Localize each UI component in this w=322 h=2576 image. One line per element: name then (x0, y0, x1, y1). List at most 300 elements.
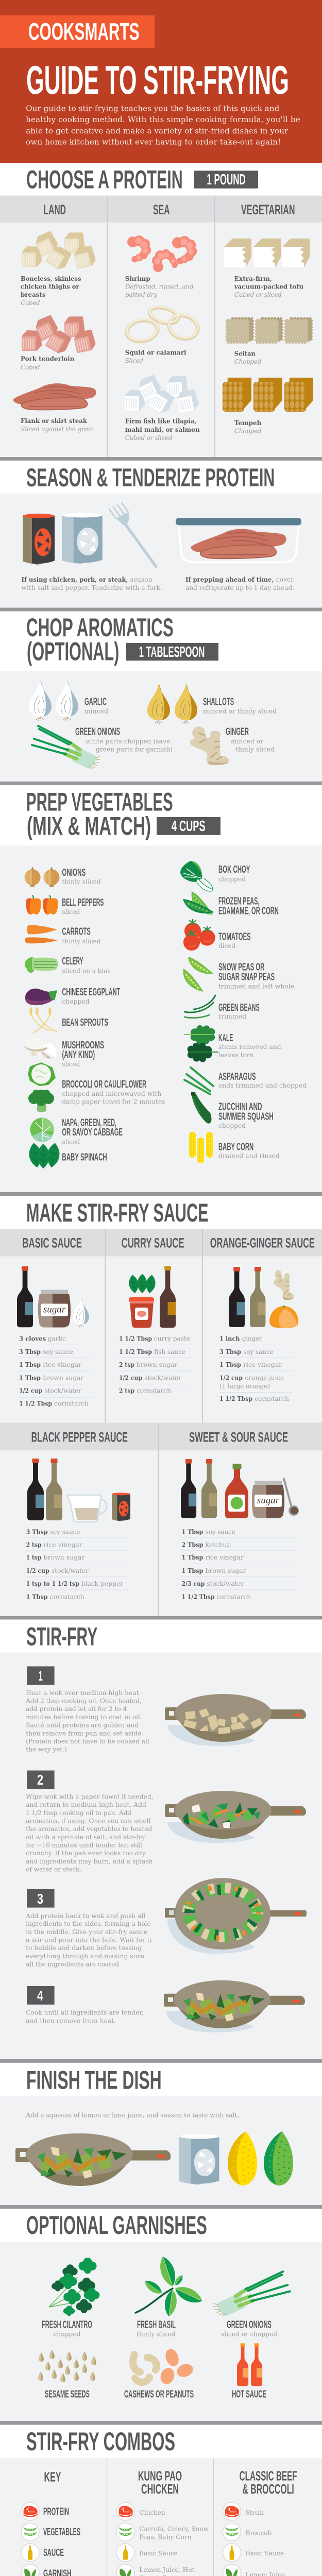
panel: combos grid (0, 2458, 322, 2576)
label: bok choy (218, 864, 250, 883)
icon: shallots (147, 683, 197, 724)
list: black pepper sauce: brown sugar (44, 1554, 85, 1561)
list: sweet and sour sauce: 1 Tbsp (181, 1567, 204, 1574)
text: season: season (130, 576, 152, 583)
heading: stir-fry combos: STIR-FRY COMBOS (26, 2427, 175, 2456)
label: asparagus: ASPARAGUS (218, 1071, 256, 1082)
list: sweet and sour sauce: soy sauce (206, 1528, 235, 1535)
list: sweet and sour sauce: cornstarch (216, 1594, 251, 1601)
icon: tofu (224, 239, 310, 267)
list: sweet and sour sauce: brown sugar (206, 1567, 246, 1574)
list: basic sauce: cornstarch (54, 1400, 89, 1407)
heading: optional garnishes: OPTIONAL GARNISHES (26, 2211, 207, 2240)
list: black pepper sauce: stock/water (52, 1567, 89, 1574)
step 3: in the middle. Give your stir-fry sauce (26, 1928, 147, 1936)
list: basic sauce: 1 1/2 Tbsp (19, 1400, 52, 1407)
labels: bottom row: HOT SAUCE (232, 2389, 266, 2400)
step 2: for ~10 minutes until tender but still (26, 1842, 142, 1849)
label: kale: KALE (218, 1032, 233, 1044)
icon: green onions (32, 726, 100, 769)
step 1: Heat a wok over medium-high heat. (26, 1689, 141, 1697)
list: black pepper sauce: 1 Tbsp (26, 1594, 48, 1601)
list: black pepper sauce: cornstarch (50, 1594, 84, 1601)
label: green onions: green parts for garnish) (96, 746, 173, 753)
icon: asparagus (184, 1067, 213, 1094)
label: celery (62, 956, 111, 975)
icon: basil (135, 2255, 205, 2317)
icon: chicken cubes (22, 230, 97, 272)
list: basic sauce: garlic (48, 1335, 66, 1343)
label: onions: thinly sliced (62, 878, 101, 886)
list: curry sauce: fish sauce (154, 1348, 185, 1355)
step 2: the aromatics, add vegetables to heated (26, 1825, 152, 1833)
text: chicken: breasts (21, 291, 46, 298)
label: eggplant: chopped (62, 998, 90, 1005)
icon: green beans (184, 995, 215, 1018)
icon: wok with finished stir-fry (164, 1980, 305, 2032)
step 3: Add protein back to wok and push all (25, 1912, 145, 1920)
icon: salt can (62, 513, 103, 564)
icon: wok with ingredients pushed aside (165, 1878, 307, 1954)
list: black pepper sauce: 1/2 cup (26, 1567, 49, 1574)
icon: finished wok (15, 2133, 171, 2186)
label: eggplant (62, 987, 120, 1005)
label: carrots: thinly sliced (62, 938, 101, 945)
sauce headings: CURRY SAUCE (122, 1235, 184, 1251)
text: pork (21, 355, 75, 371)
sauce headings (22, 1235, 315, 1445)
text: squid (125, 349, 187, 364)
heading: finish the dish: FINISH THE DISH (26, 2066, 162, 2095)
text: finish instruction: Add a squeeze of lemon or lime juice, and season to taste with salt. (25, 2111, 239, 2119)
step 2: and ingredients may burn, add a splash (26, 1858, 153, 1865)
label: zucchini: ZUCCHINI AND (218, 1101, 262, 1113)
list: black pepper sauce: 1 tsp (26, 1554, 42, 1561)
text: fish: Firm fish like tilapia, (125, 418, 196, 425)
combo: kung pao chicken: Chicken (139, 2509, 165, 2516)
text: steak: Sliced against the grain (21, 426, 94, 433)
list: sweet and sour sauce: ketchup (206, 1541, 231, 1548)
icon: hot sauce (237, 2343, 262, 2386)
list: basic sauce: rice vinegar (43, 1361, 81, 1368)
icon: eggplant (25, 989, 57, 1005)
list: orange-ginger sauce: orange juice (245, 1375, 284, 1382)
list: orange-ginger sauce: 1 Tbsp (219, 1361, 241, 1368)
icon: carrots (25, 925, 58, 943)
step 2: of water or stock. (26, 1866, 81, 1873)
step 2: crunchy. If the pan ever looks too dry (26, 1850, 146, 1857)
combo: kung pao chicken: KUNG PAO (138, 2468, 182, 2483)
icon: tempeh (223, 378, 313, 412)
label: tomatoes: TOMATOES (218, 931, 251, 942)
list: basic sauce: brown sugar (43, 1375, 84, 1382)
list: orange-ginger sauce: 1/2 cup (219, 1375, 243, 1382)
step 4: 4 (37, 1988, 43, 2004)
combo: kung pao chicken (116, 2468, 209, 2576)
text: fish: Cubed or sliced (125, 434, 173, 442)
label: asparagus: ends trimmed and chopped (218, 1082, 307, 1089)
labels: top row: FRESH CILANTRO (42, 2319, 92, 2331)
label: bell peppers: BELL PEPPERS (62, 897, 104, 908)
column headings: LAND (43, 202, 66, 217)
text: seitan (234, 350, 262, 365)
panel: season (0, 494, 322, 608)
icon: fork (109, 503, 156, 567)
text: chicken: Boneless, skinless (21, 275, 81, 282)
list: orange-ginger sauce: rice vinegar (243, 1361, 282, 1368)
list: black pepper sauce: black pepper (81, 1580, 123, 1587)
label: onions (62, 867, 101, 886)
step 4 (26, 1986, 144, 2024)
column headings: SEA (153, 202, 170, 217)
text: season (22, 576, 162, 591)
step 2: oil with a sprinkle of salt, and stir-fry (26, 1834, 145, 1841)
combo: key: PROTEIN (43, 2506, 69, 2518)
label: ginger (226, 726, 275, 753)
list: sweet and sour sauce: 1 Tbsp (181, 1554, 204, 1561)
icon: seitan (227, 318, 312, 343)
labels: bottom row (45, 2389, 266, 2400)
icon: pork cubes (22, 314, 97, 355)
panel: garnishes (0, 2242, 322, 2421)
list: black pepper sauce: 3 Tbsp (26, 1528, 48, 1535)
icon: celery (25, 957, 58, 973)
combo: key: VEGETABLES (43, 2527, 80, 2538)
list: curry sauce: brown sugar (137, 1361, 177, 1368)
icon: lime (264, 2131, 293, 2185)
list: orange-ginger sauce: 1 inch (219, 1335, 240, 1343)
step 2: 1 1/2 tbsp cooking oil to pan. Add (26, 1809, 131, 1817)
icon: tomatoes (183, 919, 215, 951)
heading: prep vegetables: (MIX & MATCH) (27, 811, 151, 840)
text: steak: Flank or skirt steak (21, 417, 88, 425)
panel: sauces (0, 1229, 322, 1616)
label: ginger: GINGER (226, 726, 249, 738)
text: tofu (234, 275, 303, 298)
text: seitan: Chopped (234, 358, 262, 365)
label: garlic: GARLIC (84, 697, 107, 708)
heading: choose a protein: 1 POUND (207, 172, 246, 188)
labels: top row: sliced or chopped (221, 2331, 277, 2338)
text: pork: Cubed (21, 364, 40, 371)
step 2: aromatics, if using. Once you can smell (26, 1818, 151, 1825)
step 3: all the ingredients are coated. (26, 1961, 121, 1968)
step 1: Sauté until proteins are golden and (26, 1722, 139, 1729)
panel: vegetables (0, 845, 322, 1192)
step 1: 1 (39, 1668, 43, 1684)
icon: green onions (213, 2272, 290, 2316)
panel: stir-fry steps (0, 1653, 322, 2059)
icon: cauliflower (28, 1062, 56, 1086)
list: curry sauce: cornstarch (137, 1387, 171, 1394)
list: orange-ginger sauce: 3 Tbsp (219, 1348, 241, 1355)
text: fish: mahi mahi, or salmon (125, 426, 200, 433)
step 2: 2 (37, 1772, 43, 1788)
labels: top row (42, 2319, 277, 2338)
list: black pepper sauce: rice vinegar (44, 1541, 82, 1548)
combo: classic beef and broccoli: Steak (245, 2509, 264, 2516)
labels: bottom row: SESAME SEEDS (45, 2389, 90, 2400)
icon: ginger (190, 726, 229, 765)
label: green beans (218, 1002, 260, 1020)
step 3: to bubble and darken before tossing (26, 1944, 142, 1952)
label: celery: sliced on a bias (62, 968, 111, 975)
list: orange-ginger sauce: soy sauce (243, 1348, 274, 1355)
list: basic sauce: 1/2 cup (19, 1387, 42, 1394)
text: season: with salt and pepper. Tenderize with a fork. (22, 584, 162, 591)
label: mushrooms: sliced (62, 1061, 80, 1068)
icon: baby spinach (27, 1142, 61, 1168)
icon: snow peas (178, 957, 216, 993)
list: sweet and sour sauce: rice vinegar (206, 1554, 244, 1561)
icons: sweet and sour sauce ingredients (181, 1459, 299, 1518)
label: bok choy: BOK CHOY (218, 864, 250, 875)
icons: orange-ginger sauce ingredients (229, 1267, 298, 1328)
icon: wok with vegetables (165, 1791, 306, 1843)
list: orange-ginger sauce: (1 large orange) (219, 1382, 270, 1389)
icon: peas (183, 891, 218, 916)
label: shallots (203, 697, 277, 715)
heading: chop aromatics: CHOP AROMATICS (26, 613, 174, 642)
text: tempeh: Chopped (234, 428, 262, 435)
step 1: then remove from pan and set aside. (26, 1730, 143, 1737)
text: chicken: chicken thighs or (21, 283, 79, 291)
list: orange-ginger sauce: ginger (242, 1335, 262, 1343)
label: cabbage: sliced (62, 1139, 80, 1146)
step 1: minutes before tossing to coat in oil. (26, 1714, 142, 1721)
label: cabbage (62, 1117, 123, 1146)
label: green beans: trimmed (218, 1013, 246, 1020)
label: bok choy: chopped (218, 876, 246, 883)
label: baby corn: BABY CORN (218, 1142, 253, 1153)
icon: cilantro (49, 2258, 99, 2316)
heading: chop aromatics: 1 TABLESPOON (139, 644, 205, 660)
step 3: a stir and pour into the hole. Wait for it (26, 1937, 152, 1944)
label: baby corn (218, 1142, 280, 1159)
icon: mushrooms (24, 1037, 56, 1058)
heading: chop aromatics (26, 613, 218, 666)
step 3: 3 (37, 1891, 43, 1907)
label: baby corn: drained and rinsed (218, 1152, 280, 1159)
combo: classic beef and broccoli: Broccoli (245, 2529, 272, 2536)
label: ginger: thinly sliced (235, 746, 275, 753)
list: curry sauce: 1 1/2 Tbsp (119, 1348, 152, 1355)
label: onions: ONIONS (62, 867, 86, 878)
step 3: ingredients to the sides, forming a hole (26, 1920, 151, 1927)
icon: kale (184, 1025, 218, 1062)
list: orange-ginger sauce: 1 1/2 Tbsp (219, 1395, 252, 1402)
text: shrimp: Shrimp (125, 275, 150, 282)
label: zucchini: chopped (218, 1122, 246, 1129)
label: bell peppers (62, 897, 104, 916)
icon: bell peppers (26, 895, 58, 914)
label: asparagus (218, 1071, 307, 1089)
text: tempeh (234, 419, 262, 435)
icon: zucchini (191, 1092, 211, 1124)
list: black pepper sauce: 1 tsp to 1 1/2 tsp (26, 1580, 79, 1587)
heading: prep vegetables: 4 CUPS (172, 818, 206, 835)
sauce headings: BASIC SAUCE (22, 1235, 82, 1251)
combo: classic beef and broccoli (223, 2468, 297, 2576)
logo band: COOKSMARTS (28, 18, 140, 45)
list: basic sauce: stock/water (44, 1387, 81, 1394)
icon: squid rings (125, 303, 200, 344)
icon: lemon (228, 2131, 257, 2185)
text: shrimp (125, 275, 194, 298)
icon: onions (25, 867, 60, 887)
label: green onions: GREEN ONIONS (75, 726, 120, 738)
heading: make stir-fry sauce: MAKE STIR-FRY SAUCE (26, 1198, 208, 1227)
text: shrimp: Defrosted, rinsed, and (125, 283, 194, 291)
label: kale: stems removed and (218, 1043, 281, 1050)
label: snow peas: SUGAR SNAP PEAS (218, 971, 275, 982)
combo: key: KEY (44, 2469, 61, 2484)
text: tempeh: Tempeh (234, 419, 262, 427)
text: refrigerate: cover (276, 576, 294, 583)
list: curry sauce (119, 1335, 192, 1394)
list: basic sauce: 1 Tbsp (19, 1361, 41, 1368)
step 4: and then remove from heat. (26, 2017, 116, 2024)
intro text: own home kitchen without ever having to order take-out again! (26, 138, 281, 147)
label: celery: CELERY (62, 956, 83, 967)
icon: bok choy (180, 861, 213, 891)
icon: steak (13, 383, 96, 410)
label: mushrooms: (ANY KIND) (62, 1049, 95, 1061)
icon: cashews and peanuts (133, 2347, 195, 2386)
label: kale: leaves torn (218, 1052, 254, 1059)
label: shallots: minced or thinly sliced (203, 707, 277, 715)
labels: top row: FRESH BASIL (137, 2319, 176, 2331)
text: pork: Pork tenderloin (21, 355, 75, 363)
label: baby spinach: BABY SPINACH (62, 1152, 107, 1163)
step 3 (25, 1889, 152, 1968)
intro text: Our guide to stir-frying teaches you the basics of this quick and (26, 104, 280, 113)
combo: kung pao chicken: Basic Sauce (139, 2550, 178, 2557)
list: basic sauce (19, 1335, 92, 1407)
text: season: If using chicken, pork, or steak, (22, 576, 128, 583)
list: basic sauce: soy sauce (43, 1348, 73, 1355)
list: curry sauce: curry paste (154, 1335, 190, 1343)
step 2: Wipe wok with a paper towel if needed, (26, 1793, 154, 1800)
combo: classic beef and broccoli: Basic Sauce (245, 2550, 284, 2557)
header panel (0, 0, 322, 163)
step 1: the way yet.) (26, 1746, 67, 1753)
list: orange-ginger sauce (219, 1335, 293, 1402)
label: snow peas (218, 962, 294, 990)
text: fish (125, 418, 200, 442)
combo: key: SAUCE (43, 2547, 64, 2558)
text: shrimp: patted dry (125, 291, 158, 298)
icon: wok with protein (165, 1694, 306, 1746)
step 2 (26, 1770, 154, 1873)
label: bell peppers: sliced (62, 908, 80, 916)
heading: stir-fry: STIR-FRY (26, 1622, 97, 1651)
step 3: everything through and making sure (26, 1953, 144, 1960)
text: tofu: vacuum-packed tofu (234, 283, 303, 291)
icon: garlic (29, 680, 78, 721)
step 2: and return to medium-high heat. Add (26, 1801, 146, 1808)
list: sweet and sour sauce: stock/water (207, 1580, 244, 1587)
label: tomatoes (218, 931, 251, 950)
list: sweet and sour sauce: 1 Tbsp (181, 1528, 204, 1535)
label: broccoli or cauliflower: damp paper towel for 2 minutes (62, 1098, 165, 1106)
heading: prep vegetables (26, 787, 221, 840)
labels: top row: chopped (54, 2331, 81, 2338)
text: squid: Sliced (125, 357, 143, 364)
label: broccoli or cauliflower: chopped and microwaved with (62, 1090, 162, 1097)
panel: proteins (0, 196, 322, 457)
label: snow peas: SNOW PEAS OR (218, 962, 265, 973)
label: cabbage: OR SAVOY CABBAGE (62, 1127, 123, 1138)
step 1: Add 2 tbsp cooking oil. Once heated, (25, 1697, 142, 1704)
labels: top row: thinly sliced (137, 2331, 175, 2338)
icon: shrimp (127, 235, 197, 272)
combo: kung pao chicken: CHICKEN (141, 2481, 179, 2497)
icons: black pepper sauce ingredients (27, 1459, 130, 1522)
list: black pepper sauce: soy sauce (50, 1528, 80, 1535)
icon: broccoli (28, 1090, 54, 1112)
list: sweet and sour sauce: 1 1/2 Tbsp (181, 1594, 215, 1601)
icons: curry sauce ingredients (128, 1266, 176, 1328)
step 1: add protein and let sit for 2 to 4 (26, 1705, 127, 1713)
list: basic sauce: 3 Tbsp (19, 1348, 41, 1355)
text: tofu: Cubed or sliced (234, 291, 282, 298)
text: chicken (21, 275, 81, 307)
list: orange-ginger sauce: cornstarch (255, 1395, 289, 1402)
step 1: (Protein does not have to be cooked all (26, 1738, 149, 1745)
heading: choose a protein: CHOOSE A PROTEIN (26, 165, 183, 194)
label: snow peas: trimmed and left whole (218, 983, 294, 990)
label: zucchini (218, 1101, 274, 1129)
labels: top row: GREEN ONIONS (227, 2319, 272, 2331)
label: eggplant: CHINESE EGGPLANT (62, 987, 120, 998)
heading: prep vegetables: PREP VEGETABLES (26, 787, 173, 816)
list: sweet and sour sauce: 2/3 cup (181, 1580, 205, 1587)
sauce headings: BLACK PEPPER SAUCE (31, 1429, 128, 1445)
step 1 (25, 1666, 149, 1753)
label: ginger: minced or (231, 738, 263, 745)
label: frozen peas (218, 896, 279, 917)
text: steak (21, 417, 94, 433)
text: squid: Squid or calamari (125, 349, 187, 356)
label: shallots: SHALLOTS (203, 697, 234, 708)
labels: bottom row: CASHEWS OR PEANUTS (124, 2389, 194, 2400)
combo: kung pao chicken: Peas, Baby Corn (139, 2534, 192, 2541)
list: black pepper sauce (26, 1528, 129, 1601)
icon: baby corn (189, 1132, 213, 1163)
label: cabbage: NAPA, GREEN, RED, (62, 1117, 116, 1128)
icons: basic sauce ingredients (17, 1266, 89, 1327)
intro text (26, 104, 300, 147)
label: garlic (84, 697, 108, 715)
icon: cabbage (30, 1118, 54, 1142)
icon: bean sprouts (31, 1009, 57, 1033)
combo: key (21, 2469, 80, 2576)
label: zucchini: SUMMER SQUASH (218, 1111, 274, 1123)
label: carrots: CARROTS (62, 926, 91, 938)
column headings (43, 202, 295, 217)
icon: salt can (179, 2134, 219, 2185)
list: basic sauce: 1 Tbsp (19, 1375, 41, 1382)
list: curry sauce: 2 tsp (119, 1387, 134, 1394)
list: basic sauce: 3 cloves (19, 1335, 46, 1343)
icon: fish cubes (125, 374, 200, 415)
label: broccoli or cauliflower (62, 1079, 165, 1106)
logo band (0, 15, 155, 48)
step 4: Cook until all ingredients are tender, (26, 2009, 144, 2016)
label: frozen peas: FROZEN PEAS, (218, 896, 259, 907)
label: mushrooms (62, 1040, 104, 1068)
